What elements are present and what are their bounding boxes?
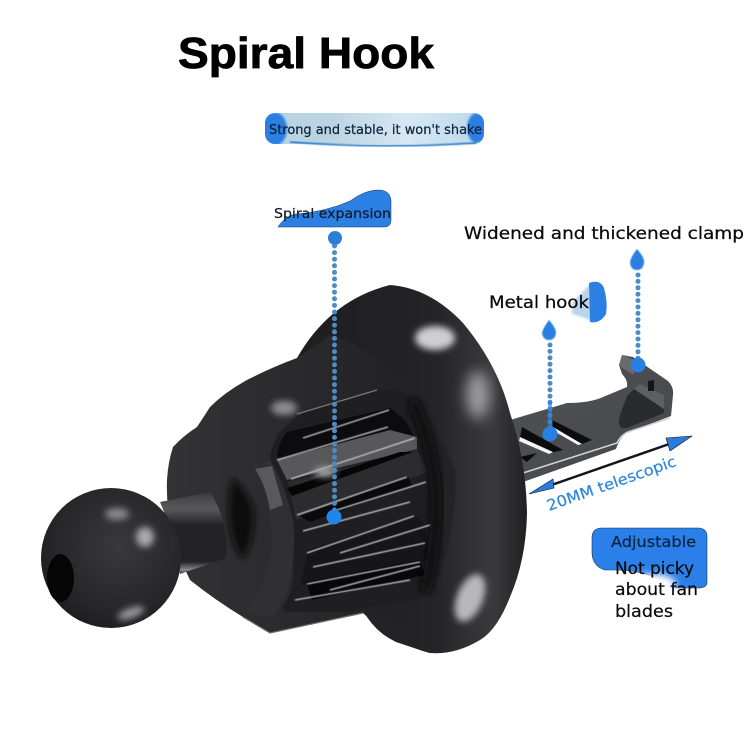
ball neck [160,492,227,574]
callout: spiral expansion: Spiral expansion [274,207,391,222]
callout: adjustable: blades [615,602,673,621]
title: Spiral Hook [178,29,435,78]
callout: adjustable: about fan [615,580,698,599]
mount flange [297,285,527,653]
vent slots [520,420,592,462]
callout: adjustable: Not picky [615,559,694,578]
callout: strong and stable: Strong and stable, it won't shake [269,123,482,138]
callout: metal hook: Metal hook [489,293,589,313]
rib highlights [297,390,377,414]
black slot [300,476,412,522]
callout: metal hook [489,282,607,322]
metal hook arm [500,355,673,482]
collar ring [246,460,294,618]
callout: strong and stable [261,112,487,146]
hook plate [500,355,673,482]
cone body [167,335,455,633]
lower groove [300,515,430,585]
arrow: 20MM travel [529,436,692,494]
bright lower edge [523,418,670,473]
lower flange tab [364,606,430,653]
socket shadow [229,478,254,560]
core right shadow [412,400,436,592]
callout: adjustable: Adjustable [611,533,696,551]
callout: spiral expansion [274,190,391,227]
dark upper groove [277,408,415,458]
callout: widened and thickened clamp: Widened and thickened clamp [464,224,744,244]
dark mid groove [288,450,428,520]
light wide rib [277,430,417,480]
pointer: spiral expansion [326,231,342,524]
pointer: metal hook [542,320,558,442]
ribbed core [270,390,443,612]
ball hole [47,554,74,602]
ball joint [41,488,181,628]
callout: adjustable [592,528,707,621]
label: 20MM telescopic: 20MM telescopic [544,452,679,515]
soft highlights on mount [271,326,491,626]
pointer: clamp [630,249,646,372]
